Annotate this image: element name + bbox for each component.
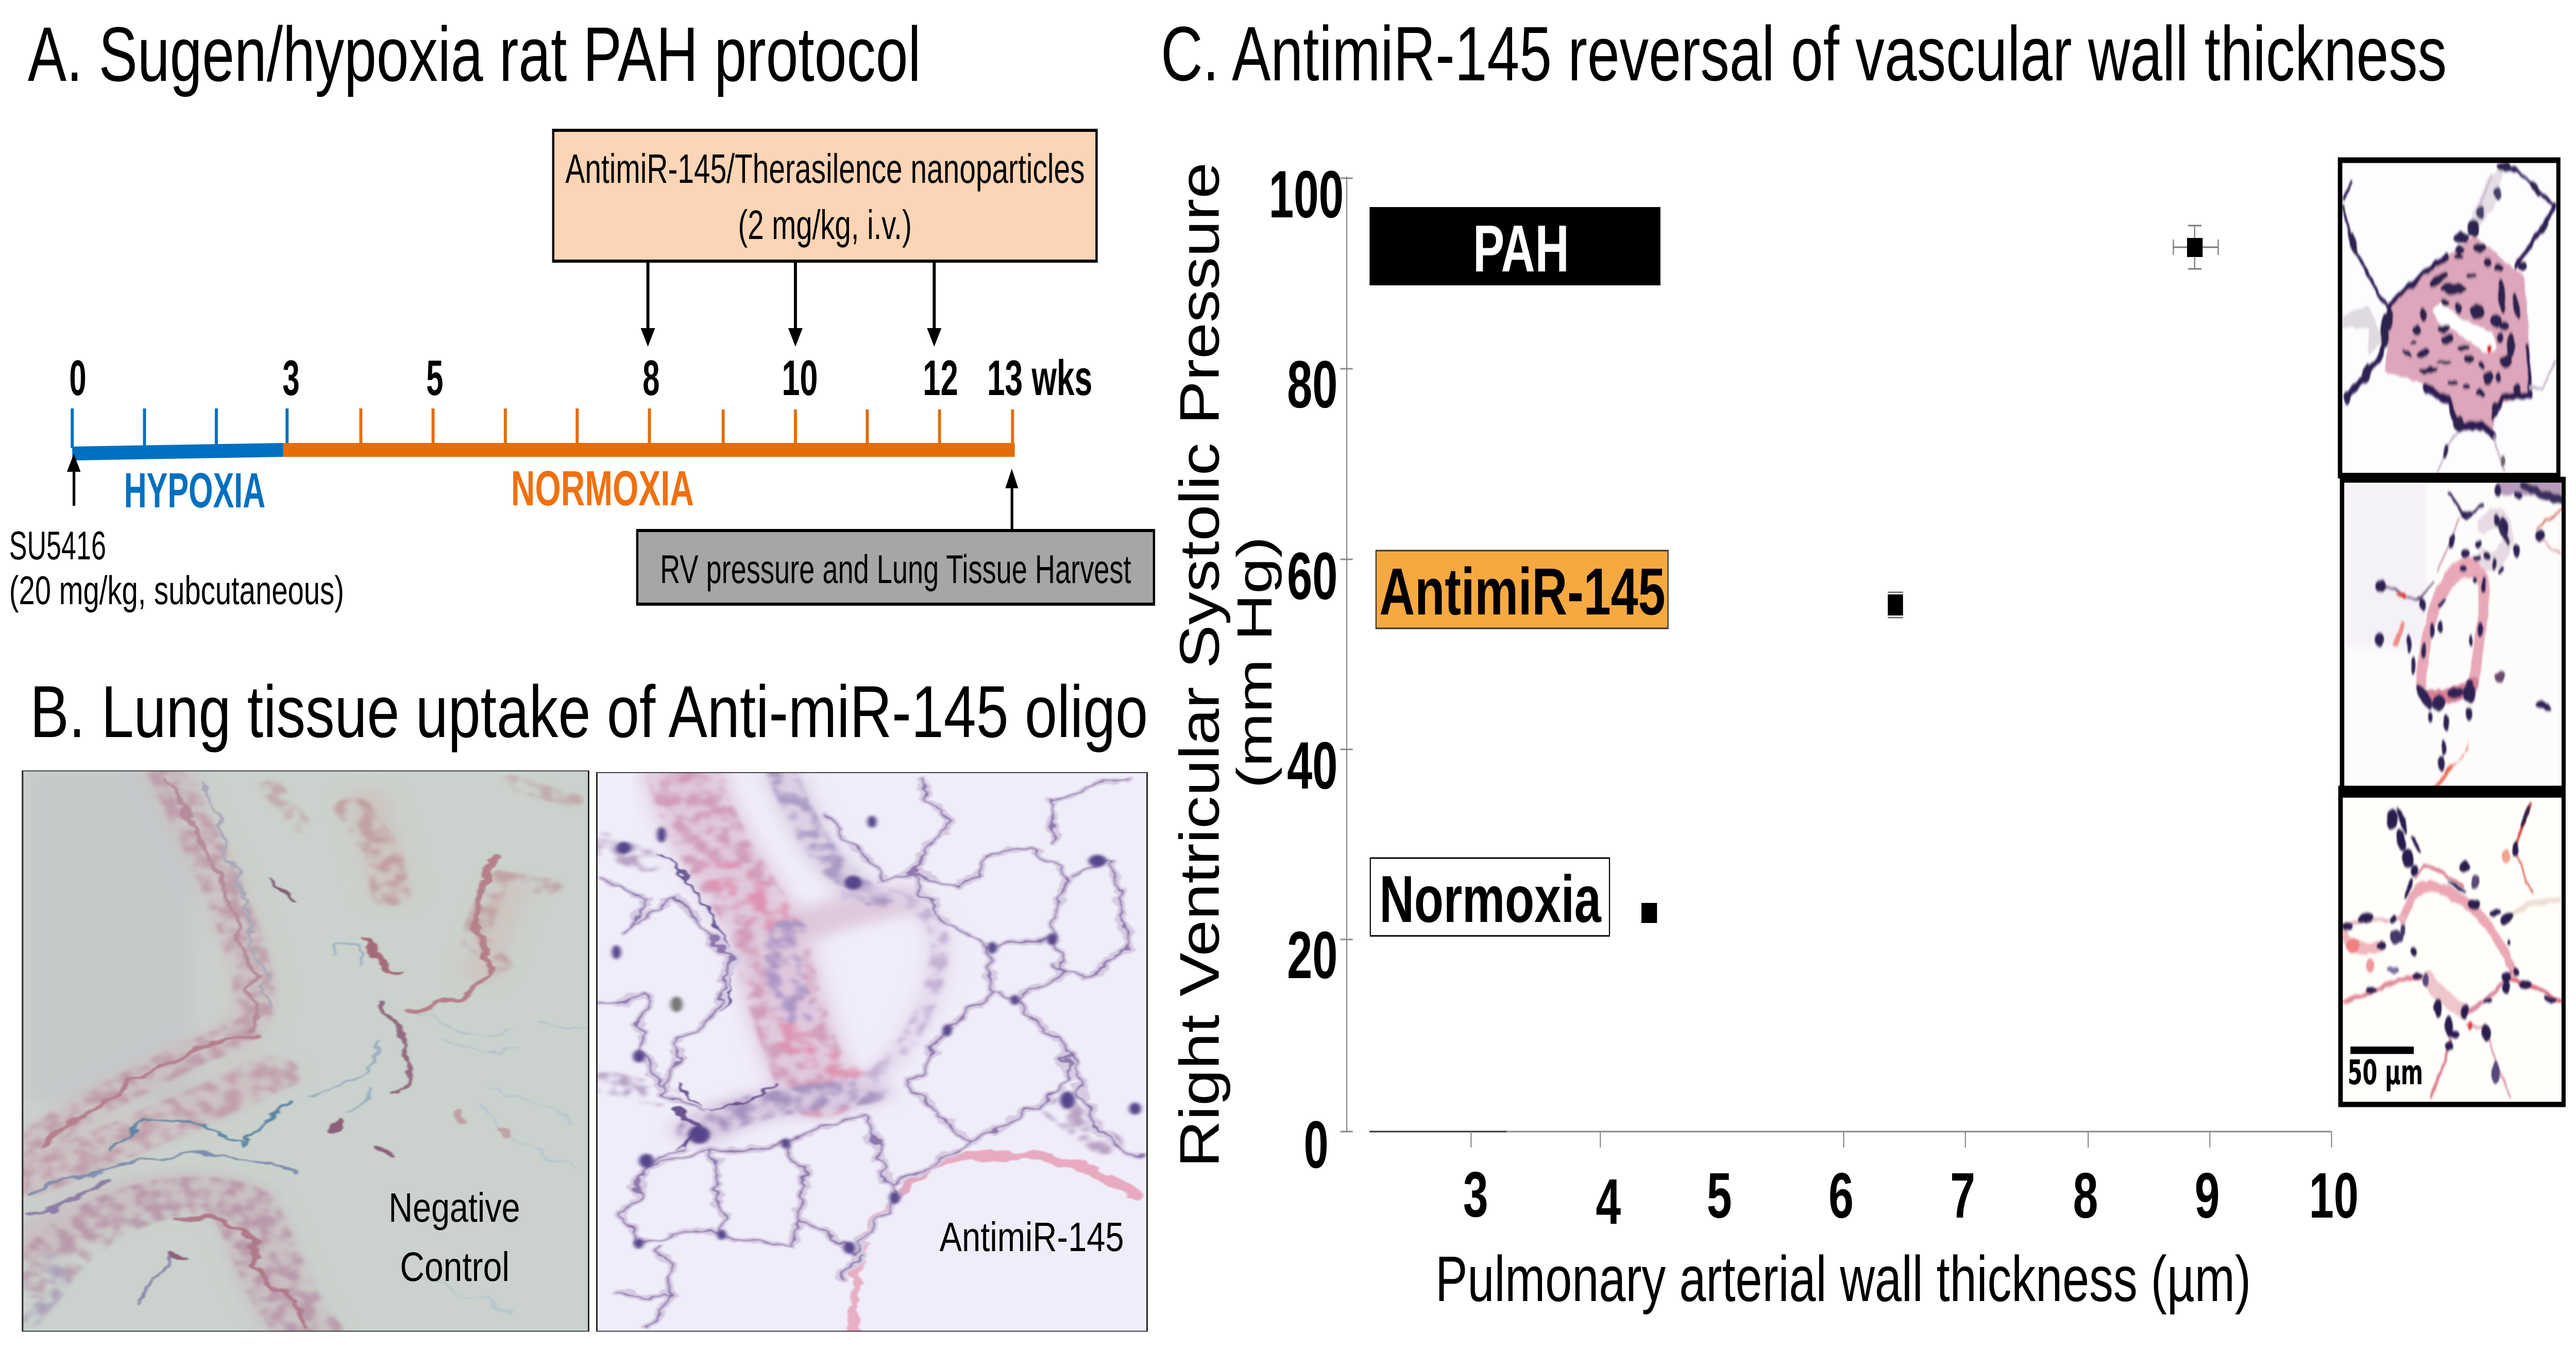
- SU5416 dose note: [9, 523, 344, 613]
- legend label: PAH: PAH: [1473, 212, 1569, 286]
- micrograph: normoxia vessel with scale bar: [2338, 786, 2566, 1107]
- label: AntimiR-145: AntimiR-145: [940, 1214, 1124, 1260]
- label: normoxia: NORMOXIA: [511, 461, 694, 516]
- x axis numbers: 10: [2309, 1160, 2359, 1232]
- SU5416 dose note: (20 mg/kg, subcutaneous): [9, 568, 344, 613]
- x axis numbers: 7: [1950, 1160, 1975, 1232]
- timeline week labels: [69, 350, 1092, 406]
- y axis: [1340, 177, 1353, 1132]
- x axis numbers: 8: [2073, 1160, 2098, 1232]
- panel C title: C. AntimiR-145 reversal of vascular wall thickness: [1161, 10, 2447, 97]
- SU5416 dose note: SU5416: [9, 523, 106, 568]
- y axis numbers: [1269, 157, 1344, 1182]
- scale bar label: 50 µm: [2347, 1053, 2423, 1092]
- panel B: lung tissue uptake: [23, 671, 1148, 1331]
- micrograph: PAH vessel: [2338, 158, 2566, 1107]
- panel A title: A. Sugen/hypoxia rat PAH protocol: [28, 11, 921, 97]
- data point: AntimiR-145: [1888, 592, 1903, 618]
- timeline week labels: 5: [426, 350, 444, 406]
- micrograph: negative control: [23, 771, 588, 1331]
- arrow: dose at week 8: [641, 261, 655, 347]
- micrograph: AntimiR-145 vessel: [2340, 477, 2566, 796]
- x axis numbers: [1463, 1159, 2359, 1238]
- label: negative control: Control: [400, 1244, 510, 1290]
- x axis numbers: 6: [1828, 1160, 1854, 1232]
- y axis numbers: 20: [1287, 917, 1337, 993]
- micrograph: AntimiR-145: [597, 773, 1147, 1331]
- timeline week labels: 10: [782, 350, 818, 406]
- timeline week labels: 12: [923, 350, 958, 406]
- y axis numbers: 40: [1287, 728, 1337, 803]
- x axis numbers: 9: [2195, 1160, 2219, 1232]
- panel C: reversal of vascular wall thickness: [1161, 10, 2566, 1315]
- timeline bar with ticks: [72, 408, 1015, 460]
- harvest box: [637, 531, 1154, 604]
- arrow: dose at week 12: [927, 261, 941, 347]
- harvest box: RV pressure and Lung Tissue Harvest: [660, 546, 1131, 592]
- treatment box: AntimiR-145 nanoparticles: AntimiR-145/Therasilence nanoparticles: [565, 146, 1085, 192]
- scale bar: [2350, 1047, 2414, 1054]
- x axis numbers: 5: [1707, 1160, 1732, 1232]
- legend label: AntimiR-145: AntimiR-145: [1379, 555, 1665, 629]
- arrow: harvest at week 13: [1005, 469, 1018, 531]
- timeline week labels: 0: [69, 350, 87, 406]
- legend label: Normoxia: Normoxia: [1379, 862, 1602, 936]
- y axis numbers: 0: [1304, 1107, 1329, 1182]
- timeline week labels: 8: [642, 350, 659, 406]
- scatter chart: [1168, 157, 2359, 1315]
- legend label: PAH: [1369, 207, 1660, 286]
- panel B title: B. Lung tissue uptake of Anti-miR-145 oligo: [30, 671, 1148, 753]
- y axis title: Right Ventricular Systolic Pressure: [1168, 162, 1231, 1168]
- label: negative control: Negative: [388, 1185, 520, 1230]
- arrow: dose at week 10: [788, 261, 803, 347]
- treatment box: AntimiR-145 nanoparticles: (2 mg/kg, i.v.): [738, 202, 912, 248]
- data point: Normoxia: [1641, 903, 1657, 923]
- y axis numbers: 80: [1287, 347, 1337, 422]
- label: hypoxia: HYPOXIA: [124, 463, 265, 518]
- label: negative control: [388, 1185, 520, 1290]
- panel A: Sugen/hypoxia protocol: [9, 11, 1154, 613]
- x axis title: Pulmonary arterial wall thickness (µm): [1435, 1243, 2251, 1315]
- y axis numbers: 60: [1287, 538, 1337, 613]
- y axis numbers: 100: [1269, 157, 1344, 232]
- timeline week labels: 13 wks: [987, 350, 1092, 406]
- x axis: [1369, 1132, 2331, 1148]
- y axis title: (mm Hg): [1227, 536, 1282, 789]
- treatment box: AntimiR-145 nanoparticles: [553, 130, 1096, 261]
- x axis numbers: 4: [1596, 1166, 1621, 1238]
- data point: PAH: [2173, 226, 2218, 269]
- timeline week labels: 3: [282, 350, 300, 406]
- y axis title: [1168, 162, 1282, 1168]
- arrow: SU5416 injection: [67, 454, 80, 506]
- x axis numbers: 3: [1463, 1159, 1488, 1230]
